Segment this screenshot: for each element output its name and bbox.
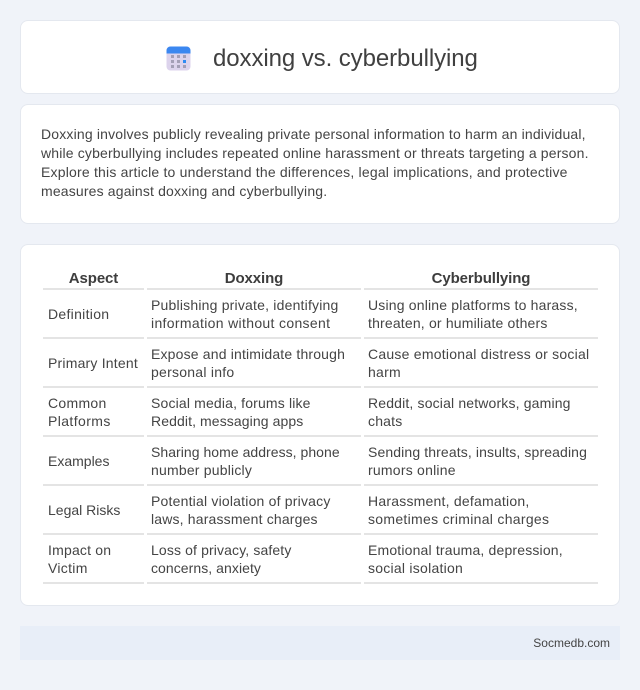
heading: doxxing vs. cyberbullying [213,45,478,72]
row: common platforms [43,395,598,437]
table panel [20,244,620,606]
row: examples: Sending threats, insults, spreading [368,444,587,460]
row: examples [43,444,598,486]
row: definition: Publishing private, identifying [151,297,339,313]
footer bar [20,626,620,660]
intro paragraph: Doxxing involves publicly revealing private personal information to harm an individual, [41,126,586,142]
row: definition: Using online platforms to harass, [368,297,578,313]
row: common platforms: Reddit, messaging apps [151,413,303,429]
icon: calendar [166,46,190,70]
row: primary intent [43,346,598,388]
row: legal risks: laws, harassment charges [151,511,318,527]
table header: Aspect [69,270,118,287]
row: primary intent: personal info [151,364,234,380]
table header: Cyberbullying [432,270,530,287]
row: impact on victim: social isolation [368,560,463,576]
row: examples: Examples [48,453,109,469]
row: legal risks [43,493,598,535]
row: impact on victim: Victim [48,560,88,576]
intro paragraph: while cyberbullying includes repeated online harassment or threats targeting a person. [41,145,589,161]
row: impact on victim [43,542,598,584]
row: primary intent: harm [368,364,401,380]
row: common platforms: chats [368,413,402,429]
intro paragraph [41,126,589,199]
row: impact on victim: Emotional trauma, depression, [368,542,563,558]
row: definition: Definition [48,306,109,322]
row: impact on victim: Impact on [48,542,111,558]
row: definition: threaten, or humiliate others [368,315,548,331]
row: definition: information without consent [151,315,330,331]
row: impact on victim: Loss of privacy, safety [151,542,291,558]
table header [43,270,598,290]
row: legal risks: Harassment, defamation, [368,493,529,509]
table header: Doxxing [225,270,283,287]
row: legal risks: sometimes criminal charges [368,511,549,527]
row: examples: number publicly [151,462,252,478]
title card [20,20,620,94]
intro paragraph: Explore this article to understand the differences, legal implications, and protective [41,164,568,180]
row: common platforms: Common [48,395,107,411]
row: examples: Sharing home address, phone [151,444,340,460]
comparison table [43,270,598,584]
row: primary intent: Cause emotional distress or social [368,346,589,362]
intro text panel [20,104,620,224]
row: legal risks: Potential violation of privacy [151,493,331,509]
row: examples: rumors online [368,462,456,478]
row: primary intent: Primary Intent [48,355,138,371]
row: common platforms: Reddit, social networks, gaming [368,395,571,411]
row: impact on victim: concerns, anxiety [151,560,261,576]
row: common platforms: Social media, forums like [151,395,311,411]
row: common platforms: Platforms [48,413,111,429]
footer source text: Socmedb.com [533,636,610,650]
row: primary intent: Expose and intimidate through [151,346,345,362]
row: definition [43,297,598,339]
row: legal risks: Legal Risks [48,502,120,518]
intro paragraph: measures against doxxing and cyberbullying. [41,183,327,199]
